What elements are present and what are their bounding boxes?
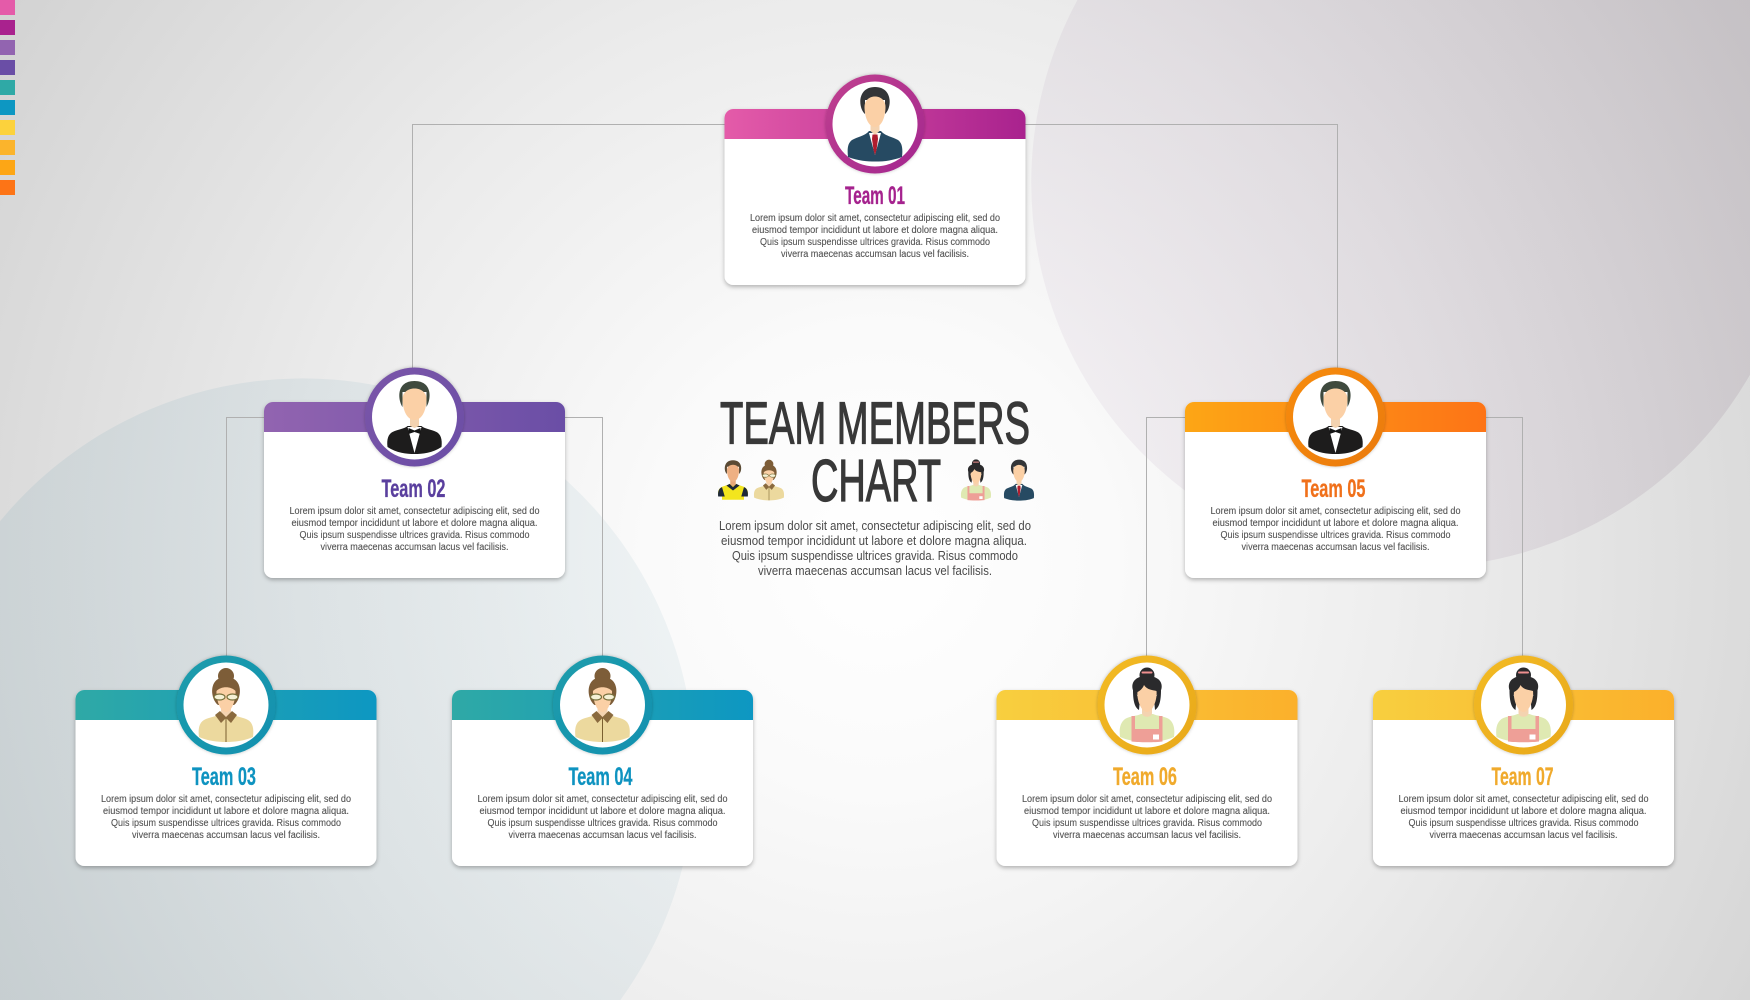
heading: Team 04 xyxy=(568,763,633,791)
body text: viverra maecenas accumsan lacus vel facilisis. xyxy=(1430,830,1618,841)
body text xyxy=(1022,794,1272,841)
body text: Quis ipsum suspendisse ultrices gravida. Risus commodo xyxy=(760,237,990,248)
icon: man with bow tie xyxy=(387,381,442,454)
connector lines xyxy=(226,124,1522,690)
icon: man in suit with red tie xyxy=(848,87,902,162)
body text: viverra maecenas accumsan lacus vel facilisis. xyxy=(132,830,320,841)
body text: viverra maecenas accumsan lacus vel facilisis. xyxy=(1242,542,1430,553)
body text: eiusmod tempor incididunt ut labore et dolore magna aliqua. xyxy=(480,806,726,817)
body text xyxy=(750,213,1000,260)
body text: Quis ipsum suspendisse ultrices gravida. Risus commodo xyxy=(1408,818,1639,829)
body text: eiusmod tempor incididunt ut labore et dolore magna aliqua. xyxy=(103,806,349,817)
icon: woman with apron xyxy=(1496,668,1551,742)
icon: woman with glasses xyxy=(754,460,784,500)
body text xyxy=(1398,794,1649,841)
intro text: eiusmod tempor incididunt ut labore et dolore magna aliqua. xyxy=(721,534,1027,548)
body text: Lorem ipsum dolor sit amet, consectetur adipiscing elit, sed do xyxy=(1398,794,1649,805)
intro text: Quis ipsum suspendisse ultrices gravida. Risus commodo xyxy=(732,549,1018,563)
body text: eiusmod tempor incididunt ut labore et dolore magna aliqua. xyxy=(1024,806,1270,817)
body text: viverra maecenas accumsan lacus vel facilisis. xyxy=(781,249,969,260)
body text xyxy=(478,794,728,841)
title block xyxy=(718,390,1034,578)
icon: woman with glasses xyxy=(575,668,630,742)
title text xyxy=(720,390,1030,514)
panel: Team 07 xyxy=(1373,656,1674,866)
panel: Team 03 xyxy=(76,656,376,866)
body text: Lorem ipsum dolor sit amet, consectetur adipiscing elit, sed do xyxy=(101,794,351,805)
body text: Quis ipsum suspendisse ultrices gravida. Risus commodo xyxy=(1032,818,1262,829)
heading: Team 05 xyxy=(1302,475,1366,503)
icon: woman with apron xyxy=(961,459,991,500)
intro text: Lorem ipsum dolor sit amet, consectetur adipiscing elit, sed do xyxy=(719,519,1031,533)
body text xyxy=(101,794,351,841)
body text: Lorem ipsum dolor sit amet, consectetur adipiscing elit, sed do xyxy=(1022,794,1272,805)
panel: Team 04 xyxy=(452,656,753,866)
body text xyxy=(290,506,540,553)
body text xyxy=(1210,506,1461,553)
body text: Lorem ipsum dolor sit amet, consectetur adipiscing elit, sed do xyxy=(750,213,1000,224)
panel: Team 05 xyxy=(1185,368,1486,578)
body text: Quis ipsum suspendisse ultrices gravida. Risus commodo xyxy=(300,530,530,541)
background circle: pink xyxy=(1031,0,1750,568)
body text: eiusmod tempor incididunt ut labore et dolore magna aliqua. xyxy=(292,518,538,529)
colour swatches xyxy=(0,0,15,195)
body text: Quis ipsum suspendisse ultrices gravida. Risus commodo xyxy=(1220,530,1451,541)
icon: woman with apron xyxy=(1120,668,1174,742)
body text: eiusmod tempor incididunt ut labore et dolore magna aliqua. xyxy=(1212,518,1458,529)
title text: TEAM MEMBERS xyxy=(720,390,1030,456)
intro text xyxy=(719,519,1031,578)
body text: eiusmod tempor incididunt ut labore et dolore magna aliqua. xyxy=(1400,806,1646,817)
body text: eiusmod tempor incididunt ut labore et dolore magna aliqua. xyxy=(752,225,998,236)
body text: Quis ipsum suspendisse ultrices gravida. Risus commodo xyxy=(111,818,341,829)
panel: Team 01 xyxy=(724,74,1026,285)
body text: Lorem ipsum dolor sit amet, consectetur adipiscing elit, sed do xyxy=(478,794,728,805)
icon: man with bow tie xyxy=(1308,381,1363,454)
body text: viverra maecenas accumsan lacus vel facilisis. xyxy=(1053,830,1241,841)
intro text: viverra maecenas accumsan lacus vel facilisis. xyxy=(758,564,992,578)
body text: Lorem ipsum dolor sit amet, consectetur adipiscing elit, sed do xyxy=(290,506,540,517)
title text: CHART xyxy=(811,448,941,514)
background circle: blue xyxy=(0,378,695,1000)
heading: Team 01 xyxy=(845,182,905,210)
body text: Quis ipsum suspendisse ultrices gravida. Risus commodo xyxy=(488,818,718,829)
body text: viverra maecenas accumsan lacus vel facilisis. xyxy=(508,830,696,841)
heading: Team 07 xyxy=(1492,763,1554,791)
icon: player xyxy=(718,460,748,500)
body text: viverra maecenas accumsan lacus vel facilisis. xyxy=(320,542,508,553)
icon: woman with glasses xyxy=(199,668,253,742)
heading: Team 06 xyxy=(1113,763,1177,791)
heading: Team 03 xyxy=(192,763,256,791)
panel: Team 02 xyxy=(264,368,565,578)
body text: Lorem ipsum dolor sit amet, consectetur adipiscing elit, sed do xyxy=(1210,506,1461,517)
panel: Team 06 xyxy=(996,656,1298,866)
heading: Team 02 xyxy=(382,475,446,503)
icon: man in suit xyxy=(1004,460,1034,501)
